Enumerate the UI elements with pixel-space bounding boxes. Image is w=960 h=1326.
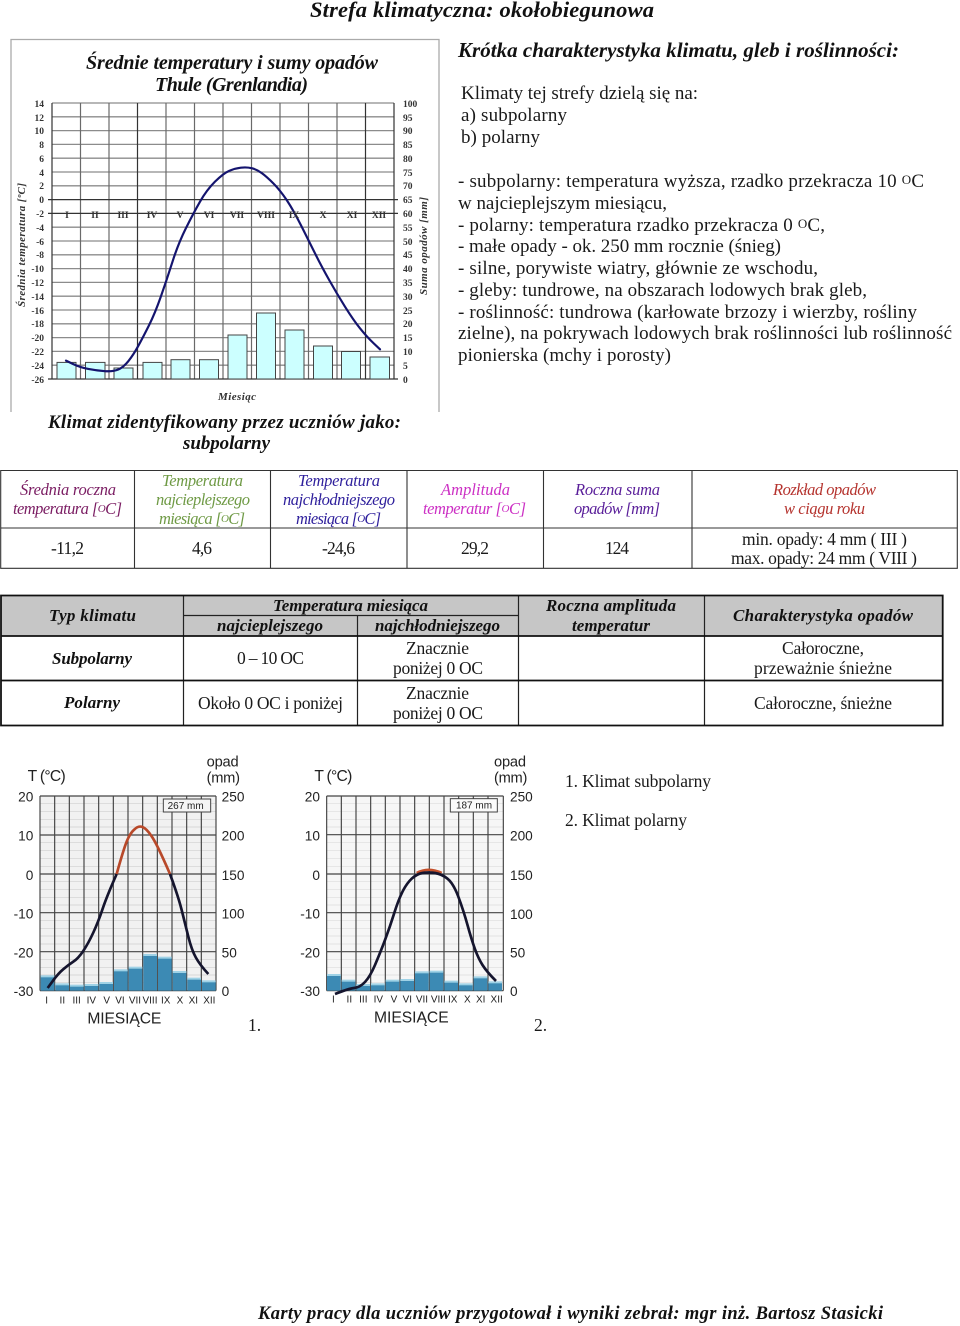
axis labels: 0 [312,868,320,883]
data values: 124 [605,538,629,558]
precipitation bars [41,955,216,991]
axis labels: 0 [510,984,518,999]
axis labels: 0 [26,868,34,883]
text block: characteristics list: w najcieplejszym miesiącu, [458,193,667,214]
header: amplitude: O [502,503,510,515]
month labels: VIII [143,995,157,1006]
header: amplitude [423,480,526,518]
row: subpolar: Subpolarny [52,649,132,668]
header: mean annual temperature: C] [105,499,122,518]
text block: characteristics list [458,171,952,366]
month labels: XI [347,211,358,221]
month labels: V [391,995,398,1006]
header: amplitude: Amplituda [440,480,510,499]
data values: 29,2 [461,538,489,558]
temperature curve [66,167,380,371]
right axis labels: 60 [403,210,413,220]
text block: characteristics list: - roślinność: tundrowa (karłowate brzozy i wierzby, rośliny [458,302,918,323]
x axis title: MIESIĄCE [87,1010,161,1027]
axis labels: -20 [14,945,34,960]
header: precipitation distribution: w ciągu roku [784,499,865,518]
month labels [45,995,215,1006]
axis labels: 50 [510,945,526,960]
right axis labels: 20 [403,320,413,330]
left axis labels: 6 [39,155,44,165]
month labels: II [347,995,352,1006]
chart 2: polar climate [300,755,533,1027]
right axis labels: 15 [403,334,413,344]
right axis labels: 55 [403,224,413,234]
right axis labels: 50 [403,238,413,248]
row: subpolar [52,638,892,678]
header: precipitation distribution: Rozkład opadów [772,480,876,499]
footer credit: Karty pracy dla uczniów przygotował i wyniki zebrał: mgr inż. Bartosz Stasicki [257,1304,884,1324]
month labels: IX [448,995,458,1006]
left axis labels: -10 [31,265,44,275]
temperature curve above zero [117,827,170,874]
month labels: VII [416,995,428,1006]
left axis labels: -4 [36,224,44,234]
axis labels: 10 [18,829,34,844]
right axis labels: 85 [403,141,413,151]
left axis labels: 8 [39,141,44,151]
row: polar: Całoroczne, śnieżne [754,693,892,713]
right axis title: Suma opadów [mm] [418,197,430,295]
temperature curve autumn [170,874,208,974]
left axis labels: -2 [36,210,44,220]
right axis labels [403,100,418,386]
left axis labels: 2 [39,182,44,192]
text block: characteristics list: pionierska (mchy i porosty) [458,345,671,366]
right axis labels: 75 [403,169,413,179]
header: mean annual temperature: temperatura [ [13,499,98,518]
month labels: III [359,995,367,1006]
axis labels: (mm) [207,770,240,786]
table header background [1,595,943,636]
header: amplitude: C] [509,499,526,518]
left axis labels: 14 [34,100,44,110]
chart legend: 1. Klimat subpolarny [565,771,711,791]
chart legend: 2. Klimat polarny [565,810,687,830]
data values [51,529,917,568]
row: polar: poniżej 0 OC [393,703,483,723]
left axis title: Średnia temperatura [ºC] [16,183,28,307]
row: polar [63,683,892,723]
chart title: Średnie temperatury i sumy opadów [86,50,379,74]
month labels: IX [161,995,171,1006]
left axis labels: -22 [31,348,44,358]
left axis labels: -18 [31,320,44,330]
month labels: V [177,211,184,221]
data values: min. opady: 4 mm ( III ) [742,529,907,549]
left axis labels: 0 [39,196,44,206]
header: coldest month [283,471,395,528]
month labels: X [464,995,471,1006]
text block: climate subdivisions: b) polarny [461,127,540,148]
month labels [332,995,503,1006]
right axis labels: 80 [403,155,413,165]
temperature curve below zero [48,874,117,988]
month labels: II [91,211,99,221]
axis labels: 20 [305,790,320,805]
left axis labels: 12 [34,114,44,124]
temperature curve [335,872,496,994]
table headers [49,596,914,635]
row: polar: Znacznie [406,683,469,703]
axis labels: 10 [305,829,320,844]
axis labels: T (°C) [314,768,352,785]
axis labels: 100 [222,906,245,921]
month labels: XII [491,995,503,1006]
axis labels: (mm) [494,770,527,786]
left axis labels: -6 [36,238,44,248]
header: coldest month: najchłodniejszego [283,490,395,509]
axis labels: -30 [14,984,34,999]
data values: -24,6 [322,538,355,558]
month labels: I [65,211,69,221]
chart number 2: 2. [534,1015,547,1035]
row: polar: Około 0 OC i poniżej [198,693,343,713]
light bar tops [41,954,216,987]
chart legend [565,771,711,830]
header: warmest month [156,471,250,528]
data values: max. opady: 24 mm ( VIII ) [731,548,917,568]
axis labels: -30 [300,984,320,999]
month labels: III [117,211,129,221]
month labels: IX [289,211,299,221]
axis labels: -10 [300,906,320,921]
axis labels: 50 [222,945,237,960]
table headers: temperatur [572,616,650,635]
light bar tops [327,971,502,986]
row: subpolar: poniżej 0 OC [393,658,483,678]
chart frame [11,40,439,412]
table headers: Roczna amplituda [545,596,676,615]
axis labels: -10 [14,906,34,921]
text block: characteristics list: O [902,172,911,187]
left axis labels: -26 [31,376,44,386]
text block: characteristics list: O [798,216,807,231]
left axis labels: 10 [34,127,44,137]
month labels: VI [115,995,125,1006]
month labels: VIII [431,995,446,1006]
text block: climate subdivisions: Klimaty tej strefy dzielą się na: [461,83,698,104]
right axis labels: 35 [403,279,413,289]
chart title [86,50,379,96]
right axis labels: 95 [403,114,413,124]
identified climate note [47,412,401,454]
identified climate note: subpolarny [182,433,271,454]
right axis labels: 90 [403,127,413,137]
axis labels [14,755,245,999]
row: subpolar: 0 – 10 OC [237,648,304,668]
month labels: V [103,995,110,1006]
month labels: VII [129,995,141,1006]
identified climate note: Klimat zidentyfikowany przez uczniów jako: [47,412,401,433]
month labels: XII [372,211,386,221]
chart title: Thule (Grenlandia) [155,74,308,96]
text block: characteristics list: - silne, porywiste wiatry, głównie ze wschodu, [458,258,818,279]
header: mean annual temperature: O [98,503,106,515]
precipitation bars [327,972,502,991]
axis labels: -20 [300,945,320,960]
left axis labels: 4 [39,169,44,179]
table: climate data for Thule [1,470,957,568]
right axis labels: 25 [403,307,413,317]
text block: characteristics list: - subpolarny: temperatura wyższa, rzadko przekracza 10 [458,171,897,192]
axis labels: 250 [510,790,533,805]
axis labels: 150 [510,868,533,883]
header: annual precipitation: Roczna suma [574,480,660,499]
axis labels: 250 [222,790,245,805]
text block: characteristics list: C, [807,215,825,236]
row: subpolar: Całoroczne, [782,638,864,658]
temperature curve above zero [417,870,442,873]
text block: climate subdivisions [461,83,698,148]
header: warmest month: O [221,513,229,525]
x axis title: Miesiąc [217,391,256,403]
total precipitation box: 187 mm [456,801,492,812]
month labels: XI [189,995,198,1006]
table headers: najcieplejszego [217,616,323,635]
header: mean annual temperature [13,480,122,518]
header: coldest month: C] [364,509,381,528]
right axis labels: 40 [403,265,413,275]
text block: characteristics list: - gleby: tundrowe, na obszarach lodowych brak gleb, [458,280,867,301]
precipitation bars [57,313,390,379]
heading: short characteristics: Krótka charakterystyka klimatu, gleb i roślinności: [457,38,899,62]
total precipitation box [163,799,211,812]
axis labels: 0 [222,984,230,999]
text block: characteristics list: - małe opady - ok. 250 mm rocznie (śnieg) [458,236,781,257]
right axis labels: 10 [403,348,413,358]
header: warmest month: Temperatura [162,471,243,490]
row: subpolar: przeważnie śnieżne [754,658,892,678]
row: subpolar: Znacznie [406,638,469,658]
axis labels: T (°C) [28,768,66,785]
left axis labels: -8 [36,251,44,261]
axis labels: 200 [222,829,245,844]
chart 1: subpolar climate [14,755,245,1027]
text block: characteristics list: zielne), na pokrywach lodowych brak roślinności lub roślinność [458,323,952,344]
month labels: IV [374,995,383,1006]
chart: Thule temperature and precipitation [11,40,439,412]
data values: -11,2 [51,538,84,558]
month labels: IV [147,211,157,221]
month labels: I [45,995,48,1006]
right axis labels: 5 [403,362,408,372]
month labels: X [177,995,184,1006]
header: amplitude: temperatur [ [423,499,502,518]
axis labels: 20 [18,790,34,805]
month labels: VI [204,211,215,221]
left axis labels: -20 [31,334,44,344]
month labels: VII [230,211,244,221]
axis labels: 200 [510,829,533,844]
left axis labels: -16 [31,307,44,317]
data values: 4,6 [192,538,212,558]
month labels: VI [403,995,412,1006]
axis labels [300,755,533,999]
text block: characteristics list: - polarny: temperatura rzadko przekracza 0 [458,215,793,236]
table headers: Temperatura miesiąca [273,596,428,615]
header: warmest month: C] [228,509,245,528]
right axis labels: 45 [403,251,413,261]
right axis labels: 70 [403,182,413,192]
month labels: IV [87,995,96,1006]
header: coldest month: miesiąca [ [296,509,358,528]
right axis labels: 30 [403,293,413,303]
axis labels: opad [494,755,526,771]
axis labels: 150 [222,868,245,883]
axis labels: 100 [510,907,533,922]
month labels: XII [203,995,215,1006]
month labels: X [320,211,327,221]
table headers: najchłodniejszego [375,616,500,635]
month labels: I [332,995,335,1006]
right axis labels: 0 [403,376,408,386]
header: mean annual temperature: Średnia roczna [20,480,116,499]
total precipitation box [450,799,497,812]
month labels: III [73,995,81,1006]
table headers: Charakterystyka opadów [733,606,914,625]
header: coldest month: Temperatura [298,471,380,490]
header: annual precipitation: opadów [mm] [574,499,660,518]
month labels: II [60,995,65,1006]
table: climate types [1,595,943,726]
left axis labels: -24 [31,362,44,372]
row: polar: Polarny [63,693,120,712]
left axis labels [31,100,44,386]
text block: climate subdivisions: a) subpolarny [461,105,568,126]
right axis labels: 100 [403,100,418,110]
header: warmest month: miesiąca [ [159,509,222,528]
header: precipitation distribution [772,480,876,518]
header: coldest month: O [357,513,365,525]
axis labels: opad [207,755,239,771]
month labels: VIII [257,211,275,221]
header: annual precipitation [574,480,660,518]
total precipitation box: 267 mm [168,801,204,812]
left axis labels: -12 [31,279,44,289]
x axis title: MIESIĄCE [374,1010,449,1027]
header: warmest month: najcieplejszego [156,490,250,509]
table headers: Typ klimatu [49,606,136,625]
chart number 1: 1. [248,1015,261,1035]
text block: characteristics list: C [911,171,924,192]
right axis labels: 65 [403,196,413,206]
left axis labels: -14 [31,293,44,303]
month labels [65,211,386,221]
month labels: XI [476,995,485,1006]
